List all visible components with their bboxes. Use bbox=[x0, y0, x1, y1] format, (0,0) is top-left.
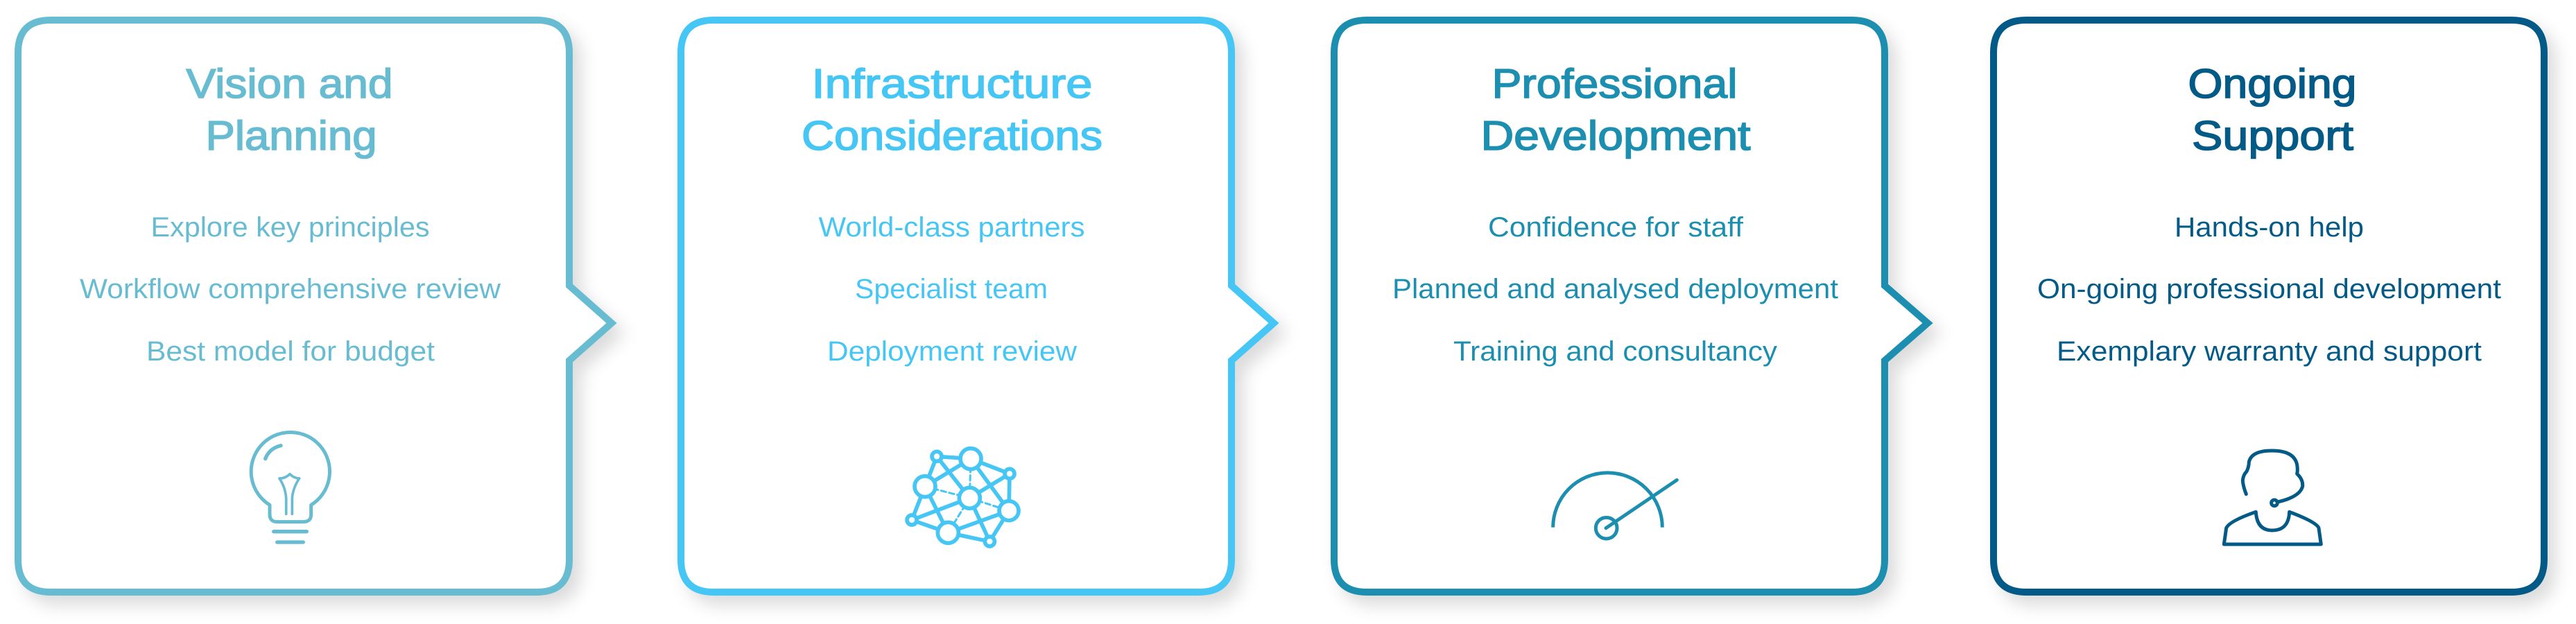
bullet list bbox=[818, 212, 1084, 367]
panel outline bbox=[1994, 20, 2544, 592]
bullet list: Workflow comprehensive review bbox=[80, 274, 501, 304]
heading: Support bbox=[2192, 113, 2353, 159]
heading: Ongoing bbox=[2188, 61, 2356, 107]
heading bbox=[1481, 61, 1750, 159]
icon: support agent with headset bbox=[2224, 451, 2321, 544]
icon: light bulb bbox=[251, 432, 329, 542]
panel outline with arrow bbox=[1334, 20, 1928, 592]
bullet list: World-class partners bbox=[818, 212, 1084, 243]
bullet list: Deployment review bbox=[827, 336, 1077, 367]
bullet list bbox=[2037, 212, 2501, 367]
heading: Planning bbox=[205, 113, 377, 159]
heading bbox=[802, 61, 1103, 159]
panel: Infrastructure Considerations bbox=[681, 20, 1274, 592]
bullet list: Exemplary warranty and support bbox=[2057, 336, 2482, 367]
heading: Development bbox=[1481, 113, 1750, 159]
heading: Infrastructure bbox=[811, 61, 1093, 107]
bullet list: Planned and analysed deployment bbox=[1392, 274, 1838, 304]
panel outline with arrow bbox=[18, 20, 612, 592]
bullet list: Best model for budget bbox=[146, 336, 435, 367]
icon: network bbox=[907, 449, 1019, 546]
bullet list: Specialist team bbox=[855, 274, 1048, 304]
heading: Considerations bbox=[802, 113, 1103, 159]
heading bbox=[2188, 61, 2356, 159]
panel: Professional Development bbox=[1334, 20, 1928, 592]
bullet list: Hands-on help bbox=[2175, 212, 2364, 243]
heading bbox=[186, 61, 392, 159]
bullet list: On-going professional development bbox=[2037, 274, 2501, 304]
panel: Vision and Planning bbox=[18, 20, 612, 592]
bullet list: Explore key principles bbox=[151, 212, 430, 243]
bullet list: Training and consultancy bbox=[1453, 336, 1777, 367]
panel: Ongoing Support bbox=[1994, 20, 2544, 592]
bullet list: Confidence for staff bbox=[1488, 212, 1744, 243]
panel outline with arrow bbox=[681, 20, 1274, 592]
heading: Vision and bbox=[186, 61, 392, 107]
icon: gauge bbox=[1553, 473, 1677, 539]
bullet list bbox=[80, 212, 501, 367]
bullet list bbox=[1392, 212, 1838, 367]
heading: Professional bbox=[1492, 61, 1738, 107]
